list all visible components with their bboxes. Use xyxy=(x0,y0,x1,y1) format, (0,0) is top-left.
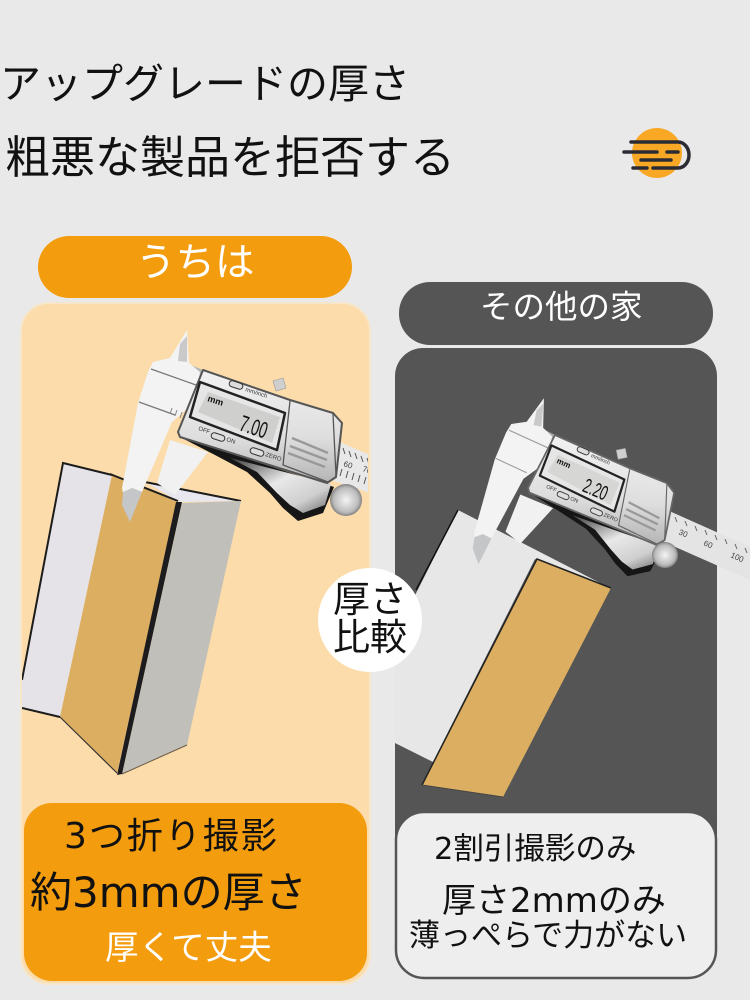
header pill: other brands xyxy=(399,282,713,345)
caliper jaws xyxy=(471,393,563,570)
header pill: our product xyxy=(38,236,352,298)
caliper scale beam: 70 xyxy=(361,464,373,476)
caliper thumb wheel xyxy=(330,484,362,516)
caliper buttons: mm/inch xyxy=(244,387,268,400)
title: アップグレードの厚さ xyxy=(0,61,410,107)
caliper buttons: ON xyxy=(225,437,236,446)
caliper reading 2.20 xyxy=(471,393,681,581)
badge: thickness comparison: 厚さ xyxy=(333,579,407,620)
LCD readout: mm xyxy=(206,393,225,408)
callout: our thickness: 約3mmの厚さ xyxy=(30,868,307,917)
callout: our thickness: 3つ折り撮影 xyxy=(64,815,279,857)
caliper buttons: ZERO xyxy=(264,452,282,463)
header pill: our product: うちは xyxy=(136,241,254,285)
caliper scale beam: 60 xyxy=(342,459,354,471)
caliper handle xyxy=(523,493,666,579)
caliper buttons: OFF xyxy=(545,484,558,494)
icon: speeding book xyxy=(624,128,689,178)
callout: other thickness: 薄っぺらで力がない xyxy=(409,918,687,953)
caliper buttons: mm/inch xyxy=(590,453,611,467)
caliper body xyxy=(178,370,342,483)
callout: our thickness: 厚くて丈夫 xyxy=(105,929,272,967)
panel: other brands xyxy=(395,282,748,836)
badge: thickness comparison: 比較 xyxy=(333,617,407,658)
thin board, two panels xyxy=(395,510,611,797)
badge: thickness comparison xyxy=(318,568,422,672)
callout: other thickness: 2割引撮影のみ xyxy=(434,832,636,867)
LCD readout: 2.20 xyxy=(580,474,611,505)
title: 粗悪な製品を拒否する xyxy=(5,132,455,183)
header pill: other brands: その他の家 xyxy=(480,289,643,325)
caliper scale beam xyxy=(332,442,368,492)
caliper buttons: OFF xyxy=(197,426,211,436)
panel: our product xyxy=(21,236,373,984)
caliper buttons: ON xyxy=(569,496,579,505)
callout: other thickness xyxy=(396,812,716,978)
caliper buttons xyxy=(197,380,328,467)
LCD readout xyxy=(537,445,627,512)
caliper buttons xyxy=(542,443,665,531)
callout: our thickness xyxy=(24,803,367,981)
caliper handle xyxy=(180,437,334,521)
caliper jaws xyxy=(122,330,208,522)
caliper scale beam, long: 60 xyxy=(702,539,714,551)
LCD readout xyxy=(190,382,285,450)
caliper scale beam, long xyxy=(655,510,750,580)
caliper buttons: ZERO xyxy=(603,512,618,524)
caliper scale beam, long: 100 xyxy=(729,551,746,564)
folded board, three panels xyxy=(22,463,241,775)
caliper scale beam, long: 30 xyxy=(677,528,689,540)
caliper thumb wheel xyxy=(652,542,678,568)
title xyxy=(0,61,455,183)
caliper reading 7.00 xyxy=(122,330,373,522)
callout: other thickness: 厚さ2mmのみ xyxy=(442,881,666,921)
LCD readout: 7.00 xyxy=(236,412,271,444)
LCD readout: mm xyxy=(555,456,572,470)
caliper body xyxy=(524,433,678,546)
